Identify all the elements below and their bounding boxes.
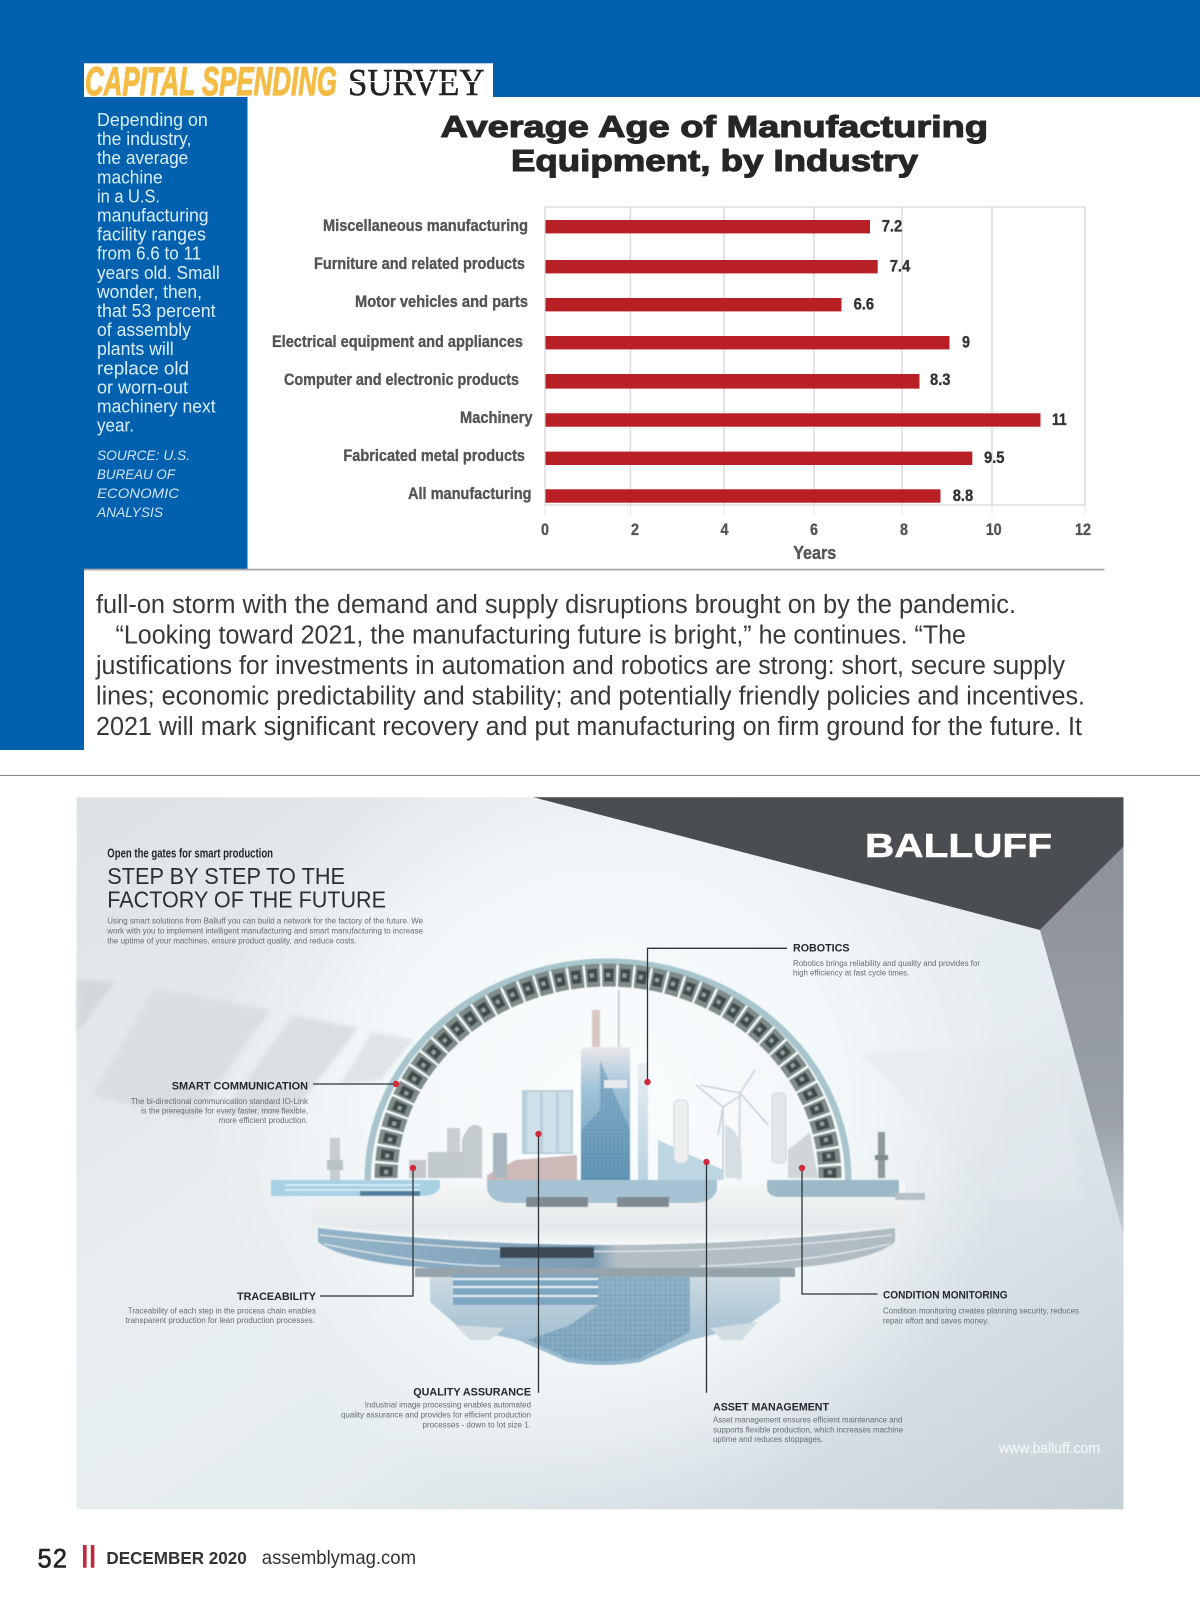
callout: quality assurance: QUALITY ASSURANCE <box>413 1387 531 1399</box>
sidebar text: the average <box>97 148 188 168</box>
callout: quality assurance: processes - down to lot size 1. <box>422 1421 531 1430</box>
sidebar text: or worn-out <box>97 377 188 397</box>
lower bowl <box>430 1277 780 1365</box>
dome ring <box>368 962 848 1180</box>
sidebar text: facility ranges <box>97 225 206 245</box>
sidebar text <box>96 110 220 436</box>
category labels: Fabricated metal products <box>343 447 525 465</box>
sidebar text: manufacturing <box>97 206 209 226</box>
callout: condition monitoring: CONDITION MONITORING <box>883 1290 1008 1302</box>
callout: robotics: ROBOTICS <box>793 942 850 954</box>
article text: full-on storm with the demand and supply disruptions brought on by the pandemic. <box>96 591 1016 619</box>
chart title: Average Age of Manufacturing <box>440 109 988 144</box>
logo: BALLUFF <box>865 827 1052 864</box>
x axis: 2 <box>631 520 639 539</box>
value labels: 9.5 <box>984 448 1004 467</box>
ad heading: STEP BY STEP TO THE <box>107 863 345 889</box>
sidebar text: Depending on <box>97 110 208 130</box>
blue page background <box>0 0 1200 750</box>
chart title <box>440 109 988 178</box>
source note: BUREAU OF <box>97 466 176 482</box>
callout: traceability: TRACEABILITY <box>237 1291 317 1303</box>
callout: smart communication: The bi-directional communication standard IO-Link <box>131 1097 309 1106</box>
category labels: Motor vehicles and parts <box>355 293 528 311</box>
sidebar text: replace old <box>97 358 189 378</box>
value labels: 7.4 <box>890 256 911 276</box>
article text: lines; economic predictability and stability; and potentially friendly policies and incentives. <box>96 682 1085 710</box>
sidebar text: that 53 percent <box>97 301 216 321</box>
ad heading: FACTORY OF THE FUTURE <box>107 886 386 912</box>
value labels: 8.8 <box>953 486 973 505</box>
callout: traceability <box>126 1165 416 1325</box>
x axis: 10 <box>986 520 1002 539</box>
callout: smart communication <box>131 1080 399 1125</box>
value labels: 8.3 <box>930 370 950 389</box>
x axis: 6 <box>810 520 818 539</box>
sidebar text: the industry, <box>97 129 191 149</box>
value labels: 11 <box>1052 410 1067 429</box>
x axis: 4 <box>720 520 729 539</box>
x axis: 12 <box>1075 520 1091 539</box>
page number: 52 <box>37 1545 67 1576</box>
stacked plates <box>453 1275 598 1305</box>
ad heading <box>106 846 424 945</box>
callout: quality assurance: quality assurance and provides for efficient production <box>341 1411 531 1420</box>
value labels <box>854 216 1067 505</box>
article text: justifications for investments in automation and robotics are strong: short, secure supply <box>95 652 1065 680</box>
bars <box>546 220 1040 503</box>
advertisement panel <box>76 797 1124 1509</box>
callout: traceability: Traceability of each step in the process chain enables <box>128 1306 316 1316</box>
red divider <box>83 1545 94 1568</box>
platform disc <box>312 1180 905 1243</box>
ad heading: work with you to implement intelligent manufacturing and smart manufacturing to increase <box>106 926 424 935</box>
footer <box>37 1545 416 1576</box>
issue date: DECEMBER 2020 <box>106 1548 247 1568</box>
callout: robotics: high efficiency at fast cycle times. <box>793 969 909 978</box>
source note: ANALYSIS <box>96 504 164 520</box>
background wall shapes <box>76 797 1124 1509</box>
callout: robotics: Robotics brings reliability and quality and provides for <box>793 959 980 968</box>
sidebar text: machine <box>97 167 163 187</box>
x axis: 8 <box>900 520 908 539</box>
sidebar text: machinery next <box>97 396 216 416</box>
callout: smart communication: SMART COMMUNICATION <box>172 1080 308 1092</box>
category labels: All manufacturing <box>408 485 532 503</box>
category labels: Furniture and related products <box>314 255 525 273</box>
website: www.balluff.com <box>998 1441 1100 1457</box>
callout: traceability: transparent production for lean production processes. <box>126 1316 315 1325</box>
website address: assemblymag.com <box>262 1547 416 1569</box>
source note <box>96 447 190 520</box>
callout: robotics <box>644 942 980 1085</box>
article text <box>95 591 1085 741</box>
category labels: Machinery <box>460 409 533 427</box>
value labels: 7.2 <box>882 216 902 236</box>
sidebar text: years old. Small <box>97 263 220 283</box>
skyline <box>327 990 888 1190</box>
value labels: 9 <box>962 332 970 352</box>
x axis: Years <box>793 543 836 563</box>
chart rule <box>84 569 1104 570</box>
ad heading: Open the gates for smart production <box>107 846 273 860</box>
sidebar text: of assembly <box>97 320 191 340</box>
callout: quality assurance: Industrial image processing enables automated <box>365 1401 531 1410</box>
value labels: 6.6 <box>854 294 874 314</box>
article text: 2021 will mark significant recovery and put manufacturing on firm ground for the future. It <box>96 713 1082 741</box>
sidebar text: year. <box>97 416 134 436</box>
sidebar text: plants will <box>97 339 174 359</box>
sidebar text: from 6.6 to 11 <box>97 244 201 264</box>
callout: asset management: Asset management ensures efficient maintenance and <box>713 1416 902 1425</box>
sidebar text: in a U.S. <box>97 186 160 206</box>
callout: quality assurance <box>341 1131 542 1430</box>
source note: SOURCE: U.S. <box>97 447 190 463</box>
callout: asset management: supports flexible production, which increases machine <box>713 1425 904 1434</box>
x axis: 0 <box>541 520 549 539</box>
callout: asset management <box>703 1159 904 1444</box>
chart title: Equipment, by Industry <box>511 143 919 178</box>
section banner: CAPITAL SPENDING <box>85 60 337 104</box>
divider <box>0 775 1200 776</box>
x axis <box>541 520 1091 563</box>
factory dome illustration <box>271 962 925 1365</box>
callout: smart communication: is the prerequisite for every faster, more flexible, <box>141 1106 308 1115</box>
callout: condition monitoring <box>799 1165 1079 1325</box>
ad heading: the uptime of your machines, ensure product quality, and reduce costs. <box>107 936 357 945</box>
stacked rings <box>318 1228 895 1268</box>
section banner: SURVEY <box>348 62 484 104</box>
bar chart <box>272 207 1091 563</box>
source note: ECONOMIC <box>97 485 180 501</box>
sidebar text: wonder, then, <box>96 282 202 302</box>
category labels: Electrical equipment and appliances <box>272 333 523 351</box>
article text: “Looking toward 2021, the manufacturing future is bright,” he continues. “The <box>116 622 966 650</box>
callout: asset management: uptime and reduces stoppages. <box>713 1435 823 1444</box>
category labels <box>272 217 533 503</box>
callout: smart communication: more efficient production. <box>219 1116 308 1125</box>
category labels: Miscellaneous manufacturing <box>323 217 528 235</box>
callout: asset management: ASSET MANAGEMENT <box>713 1401 829 1413</box>
ad heading: Using smart solutions from Balluff you can build a network for the factory of the future. We <box>107 916 424 925</box>
category labels: Computer and electronic products <box>284 371 519 389</box>
callout: condition monitoring: repair effort and saves money. <box>883 1316 989 1325</box>
callout: condition monitoring: Condition monitoring creates planning security, reduces <box>883 1307 1079 1316</box>
